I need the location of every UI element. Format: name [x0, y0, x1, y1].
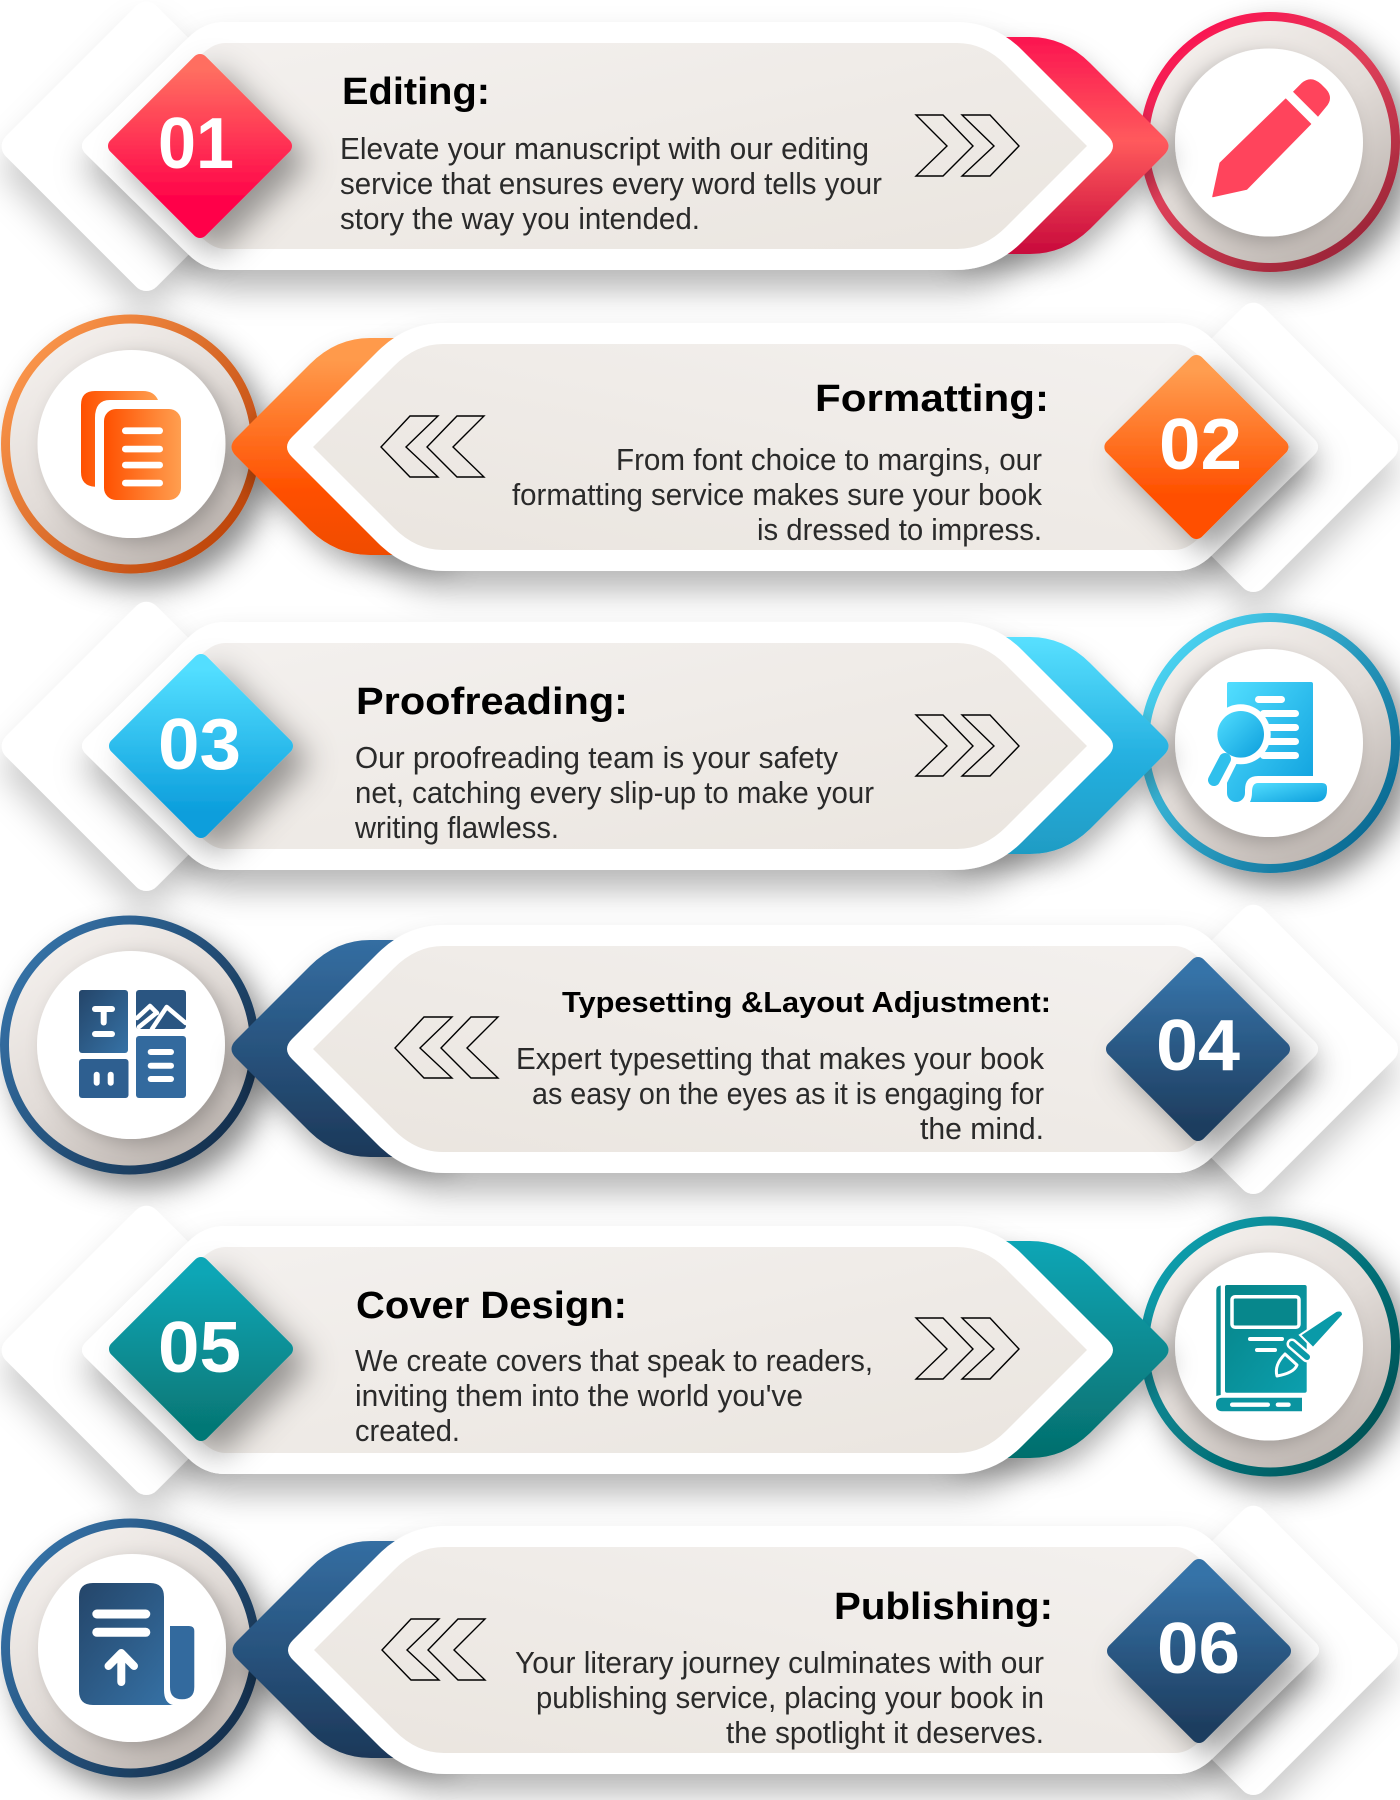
backing white diamond	[1103, 1500, 1400, 1800]
body text: as easy on the eyes as it is engaging for	[532, 1076, 1044, 1111]
body text: the spotlight it deserves.	[726, 1715, 1044, 1750]
body text	[516, 1041, 1044, 1146]
white pill	[288, 1526, 1319, 1774]
pill cast shadow	[82, 622, 1113, 870]
body text	[354, 740, 874, 845]
arrow: chevrons	[916, 715, 1019, 776]
icon: pencil	[1213, 79, 1330, 197]
white pill	[287, 323, 1318, 571]
heading: Publishing:	[834, 1586, 1053, 1628]
circle with publishing icon	[6, 1523, 256, 1773]
heading: Proofreading:	[356, 681, 628, 723]
beige inner panel	[314, 1547, 1291, 1753]
heading: Typesetting &Layout Adjustment:	[562, 987, 1051, 1019]
body text: the mind.	[920, 1111, 1044, 1146]
panel: Typesetting row	[4, 899, 1400, 1200]
pill cast shadow	[82, 1226, 1113, 1474]
body text: Elevate your manuscript with our editing	[340, 131, 869, 166]
number badge 03: 03	[158, 705, 241, 785]
beige inner panel	[110, 1247, 1087, 1453]
backing white diamond	[0, 0, 297, 297]
pill cast shadow	[82, 22, 1113, 270]
number badge 02	[1101, 352, 1292, 542]
panel: Publishing row	[6, 1500, 1400, 1800]
body text	[340, 131, 882, 236]
body text	[512, 442, 1042, 547]
arrow tip	[950, 37, 1168, 254]
arrow tip	[232, 1541, 451, 1758]
body text	[355, 1343, 873, 1448]
heading: Editing:	[342, 71, 490, 113]
icon: book and brush	[1216, 1285, 1343, 1411]
arrow tip	[950, 637, 1168, 854]
body text: Your literary journey culminates with our	[515, 1645, 1044, 1680]
number badge 04: 04	[1156, 1006, 1240, 1086]
panel: Proofreading row	[0, 596, 1395, 897]
number badge 02: 02	[1159, 405, 1242, 485]
body text: inviting them into the world you've	[355, 1378, 803, 1413]
circle with book and brush icon	[1144, 1221, 1396, 1472]
number badge 05	[106, 1254, 296, 1444]
number badge 06: 06	[1157, 1609, 1240, 1689]
number badge 03	[106, 651, 296, 841]
pill cast shadow	[287, 323, 1318, 571]
body text: service that ensures every word tells your	[340, 166, 882, 201]
beige inner panel	[313, 946, 1290, 1152]
backing white diamond	[0, 596, 297, 897]
white pill	[82, 1226, 1113, 1474]
body text: story the way you intended.	[340, 201, 700, 236]
arrow tip	[950, 1241, 1168, 1458]
arrow tip	[232, 338, 450, 555]
body text: is dressed to impress.	[757, 512, 1042, 547]
arrow: chevrons	[381, 416, 484, 477]
white pill	[82, 22, 1113, 270]
number badge 04	[1103, 954, 1293, 1144]
number badge 06	[1104, 1556, 1294, 1746]
number badge 01: 01	[158, 104, 234, 184]
backing white diamond	[1103, 899, 1400, 1200]
number badge 01	[105, 51, 295, 241]
arrow: chevrons	[916, 1318, 1019, 1379]
pill cast shadow	[288, 1526, 1319, 1774]
circle with layout icon	[4, 920, 254, 1170]
arrow tip	[232, 940, 450, 1157]
body text: created.	[355, 1413, 460, 1448]
backing white diamond	[1103, 297, 1400, 598]
body text	[515, 1645, 1044, 1750]
backing white diamond	[0, 1200, 297, 1501]
arrow: chevrons	[395, 1017, 498, 1078]
body text: Expert typesetting that makes your book	[516, 1041, 1044, 1076]
body text: writing flawless.	[354, 810, 559, 845]
body text: We create covers that speak to readers,	[355, 1343, 873, 1378]
icon: document and magnifier	[1211, 682, 1327, 802]
icon: documents	[81, 391, 181, 500]
pill cast shadow	[287, 925, 1318, 1173]
beige inner panel	[313, 344, 1290, 550]
body text: publishing service, placing your book in	[536, 1680, 1044, 1715]
body text: formatting service makes sure your book	[512, 477, 1042, 512]
arrow: chevrons	[382, 1619, 485, 1680]
beige inner panel	[110, 643, 1087, 849]
arrow: chevrons	[916, 115, 1019, 176]
circle with documents icon	[6, 319, 256, 569]
number badge 05: 05	[158, 1308, 241, 1388]
circle with magnifier icon	[1144, 618, 1396, 868]
heading: Cover Design:	[356, 1285, 627, 1327]
icon: page with upload arrow	[79, 1583, 194, 1705]
white pill	[287, 925, 1318, 1173]
panel: Cover Design row	[0, 1200, 1396, 1501]
body text: From font choice to margins, our	[616, 442, 1042, 477]
white pill	[82, 622, 1113, 870]
panel: Formatting row	[6, 297, 1400, 598]
beige inner panel	[110, 43, 1087, 249]
heading: Formatting:	[815, 378, 1049, 420]
body text: Our proofreading team is your safety	[355, 740, 838, 775]
panel: Editing row	[0, 0, 1396, 297]
icon: layout blocks	[79, 990, 186, 1098]
body text: net, catching every slip-up to make your	[355, 775, 874, 810]
circle with pencil icon	[1144, 16, 1396, 268]
